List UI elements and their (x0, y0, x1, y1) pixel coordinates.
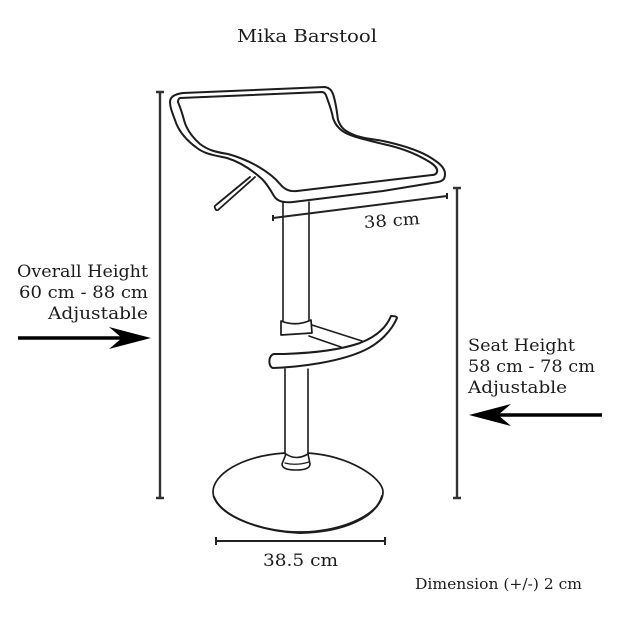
upper pole (283, 202, 309, 322)
gas lift lever (215, 177, 255, 210)
overall height label: 60 cm - 88 cm (19, 283, 148, 302)
seat width bar (273, 193, 447, 221)
icon: barstool line drawing (170, 87, 445, 533)
seat height label: 58 cm - 78 cm (468, 357, 595, 376)
footrest struts (309, 325, 362, 347)
overall height label: Overall Height (17, 262, 148, 281)
base socket (282, 454, 310, 470)
title: Mika Barstool (237, 26, 377, 47)
seat height bar (453, 188, 461, 498)
overall height label: Adjustable (47, 304, 148, 323)
base width bar (216, 537, 385, 545)
base disc (213, 453, 383, 532)
seat height label (467, 336, 595, 397)
lower pole (285, 369, 308, 454)
overall height label (17, 262, 148, 323)
base width label: 38.5 cm (263, 551, 338, 570)
arrow: seat height (469, 404, 602, 426)
arrow: overall height (18, 327, 151, 349)
dimension tolerance note: Dimension (+/-) 2 cm (415, 575, 582, 593)
seat height label: Seat Height (468, 336, 575, 355)
stool seat (170, 87, 445, 202)
overall height bar (156, 92, 164, 498)
seat width label: 38 cm (363, 209, 421, 232)
seat height label: Adjustable (467, 378, 567, 397)
footrest collar (281, 320, 312, 335)
footrest (269, 316, 397, 368)
